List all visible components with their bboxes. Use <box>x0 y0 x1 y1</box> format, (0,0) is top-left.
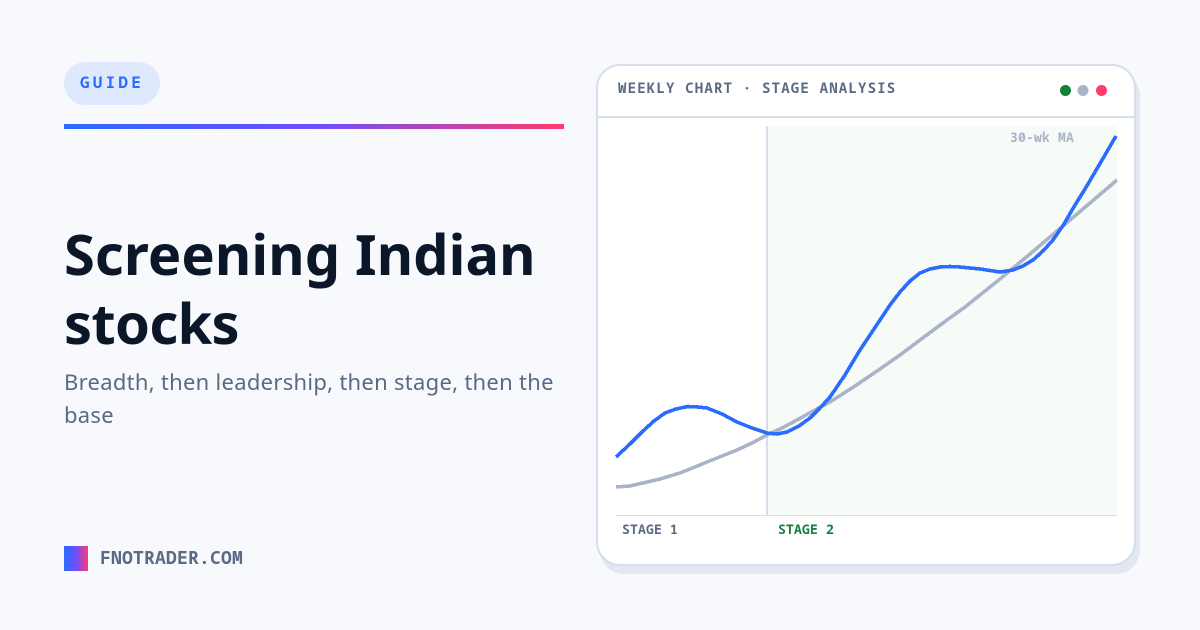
header divider <box>598 116 1134 118</box>
stage 2 label: STAGE 2 <box>778 520 834 538</box>
stage 2 shaded zone <box>767 126 1117 515</box>
stage 1 label: STAGE 1 <box>622 520 678 538</box>
badge: GUIDE: GUIDE <box>80 71 144 93</box>
panel: chart card <box>596 64 1136 566</box>
gradient accent rule <box>64 124 564 129</box>
baseline <box>616 515 1117 516</box>
stage divider line <box>766 126 768 515</box>
subtitle: Breadth, then leadership, then stage, then the base <box>64 367 554 430</box>
title: Screening Indian stocks <box>64 216 536 361</box>
badge: GUIDE <box>64 62 160 105</box>
MA label: 30-wk MA <box>1010 128 1074 146</box>
brand name: FNOTRADER.COM <box>100 546 243 570</box>
price line <box>616 136 1116 457</box>
30-week moving average line <box>616 180 1117 487</box>
status dots <box>1060 85 1107 96</box>
icon: brand gradient square <box>64 546 88 571</box>
card header title: WEEKLY CHART · STAGE ANALYSIS <box>618 79 896 98</box>
brand footer <box>64 546 243 571</box>
